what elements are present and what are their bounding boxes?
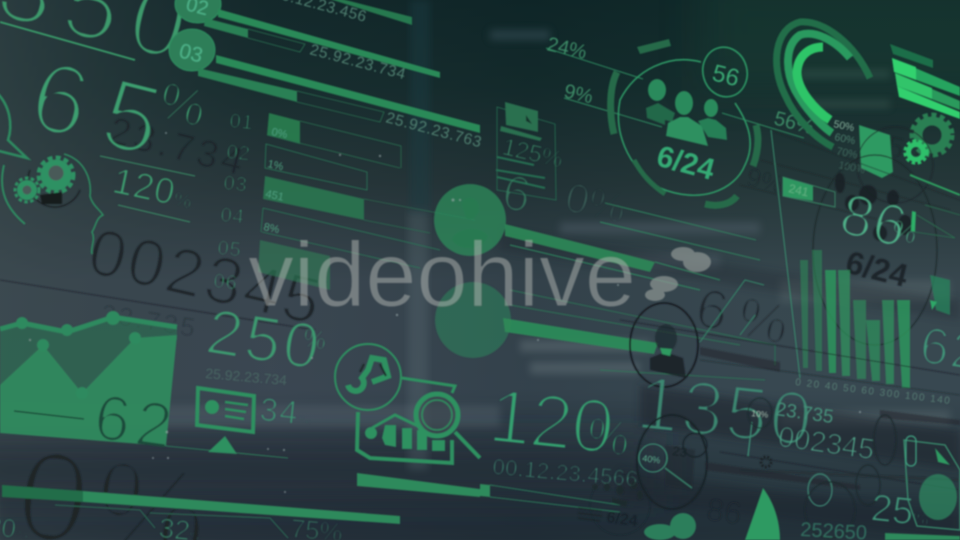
numbered list labels: 06 [212,270,239,295]
area chart [0,311,182,463]
list bars: 451 [264,188,285,204]
icon: dark person circle lower: 23 [672,443,688,460]
text: 1350: 1350 [633,360,818,463]
chart axis labels: 0 20 40 50 60 300 100 140 [795,377,952,407]
numbered list labels: 05 [216,237,243,262]
text: 6% dark: 6% [691,275,806,359]
stat 56% with line [722,108,816,139]
dust [29,132,861,493]
stat 56% with line: 56% [772,108,816,139]
text: 86 dark: 86 [704,491,744,532]
stat bubble 40% [639,444,692,488]
text: 25% bottom right: 25% [869,487,931,535]
stat bubble 40%: 40% [642,453,661,465]
text: 23.735: 23.735 [99,298,200,343]
icon: gears [905,115,952,163]
text: 86%: % [889,214,920,250]
slash after 1350 [748,422,752,456]
laptop box [496,102,631,232]
text: 6/24 dark: 6/24 [842,244,912,294]
numbered list labels: 04 [219,204,246,229]
icon: dark leaves [835,173,912,241]
icon: speech bubble [0,92,27,158]
badge 03 with bars: 03 [177,40,205,68]
dark bands [700,347,960,490]
text: 6/24: 6/24 [653,140,718,187]
text: data labels: 25.92.23.763 [384,109,484,151]
icon: dark person circle lower [637,415,707,509]
large number 65%: % [153,71,212,139]
large number 65%: 65 [20,39,190,183]
text: 34%: 34% [258,391,316,433]
text: 9% dark: 9% [744,162,787,200]
laptop box: 125% [500,134,566,174]
arc percent labels: 50% [832,118,855,134]
bar bottom right [885,533,960,540]
area chart: 62 [90,381,182,463]
text: 250%: % [301,322,329,356]
divider line top left [0,22,135,60]
bar lower centre [357,473,480,497]
stat 120%: 120% [109,160,198,217]
big green bubbles [434,184,775,380]
icon: presentation board [197,388,254,454]
text: 002345: 002345 [776,421,876,466]
small right bars [910,175,960,315]
icon: green blobs bottom [644,513,696,540]
laptop box: 0% [561,173,631,232]
box 241: 241 [787,181,810,200]
icon: team of three people [646,79,727,146]
concentric arcs chart [777,22,870,147]
icon: clouds [645,247,711,301]
icon: folder [859,125,893,178]
icon: dark person circle [630,303,698,387]
stat 24% with line: 24% [545,33,589,64]
dark lines [0,280,960,490]
bubble 56: 56 [710,60,742,92]
badge 03 with bars [169,29,480,133]
text: data labels [271,0,484,151]
pie wedge [745,488,780,540]
stat 9% with line: 9% [562,80,595,108]
box 241 [783,177,835,207]
icon: paperclip document [904,436,960,530]
people cluster with 6/24 [578,475,650,535]
text: 250%: 250 [202,295,327,384]
stat 24% with line [545,33,643,79]
numbered list labels: 01 [228,110,255,135]
dark numbers layer [8,110,924,540]
line under chart [166,446,288,458]
numbered list labels [212,110,255,295]
text: 50 dark: 50 [883,130,924,170]
long bar bottom [2,485,400,524]
text: 23.735: 23.735 [774,399,835,428]
text: faint label: 25.92.23.734 [205,365,288,388]
laptop box: 6 [498,164,535,224]
bar chart [800,250,910,388]
stripes top right [890,44,960,119]
text: timestamp: 00.12.23.4566 [492,454,639,492]
text: 120%: % [583,408,633,467]
connector lines [700,280,764,342]
text: 86%: 86 [834,182,914,261]
text: data labels: 25.92.23.734 [308,41,408,83]
dark donut outline [740,127,960,345]
top bar [320,0,412,25]
stat bubble 10%: 10% [751,408,769,420]
bottom stat outlines [0,505,344,540]
panel axis line [771,130,800,378]
watermark: videohive [248,224,636,326]
text: 23.734: 23.734 [105,110,251,185]
list bars [258,113,475,290]
list bars: 1% [266,158,285,173]
text: 002345: 002345 [82,214,331,339]
gear small [761,457,771,467]
text: 120%: 120 [485,373,617,471]
badge 02 with bars [175,0,440,78]
list bars: 0% [270,126,289,141]
arc percent labels: 60% [833,131,856,147]
arc percent labels [832,118,866,177]
icon: head with gears [2,154,103,254]
small circles lower right [805,415,896,538]
list bars: 8% [262,221,281,236]
people cluster with 6/24: 6/24 [605,509,639,530]
bubble 56 [697,42,753,102]
group circle [611,39,758,205]
stat 9% with line [562,80,662,127]
arc percent labels: 100% [837,159,866,177]
left lower bar [480,484,620,512]
arc percent labels: 70% [835,145,858,161]
icon: analytics with magnifier [335,344,480,463]
stat bubble 10% [748,398,772,428]
numbered list labels: 02 [225,141,252,166]
numbered list labels: 03 [222,172,249,197]
